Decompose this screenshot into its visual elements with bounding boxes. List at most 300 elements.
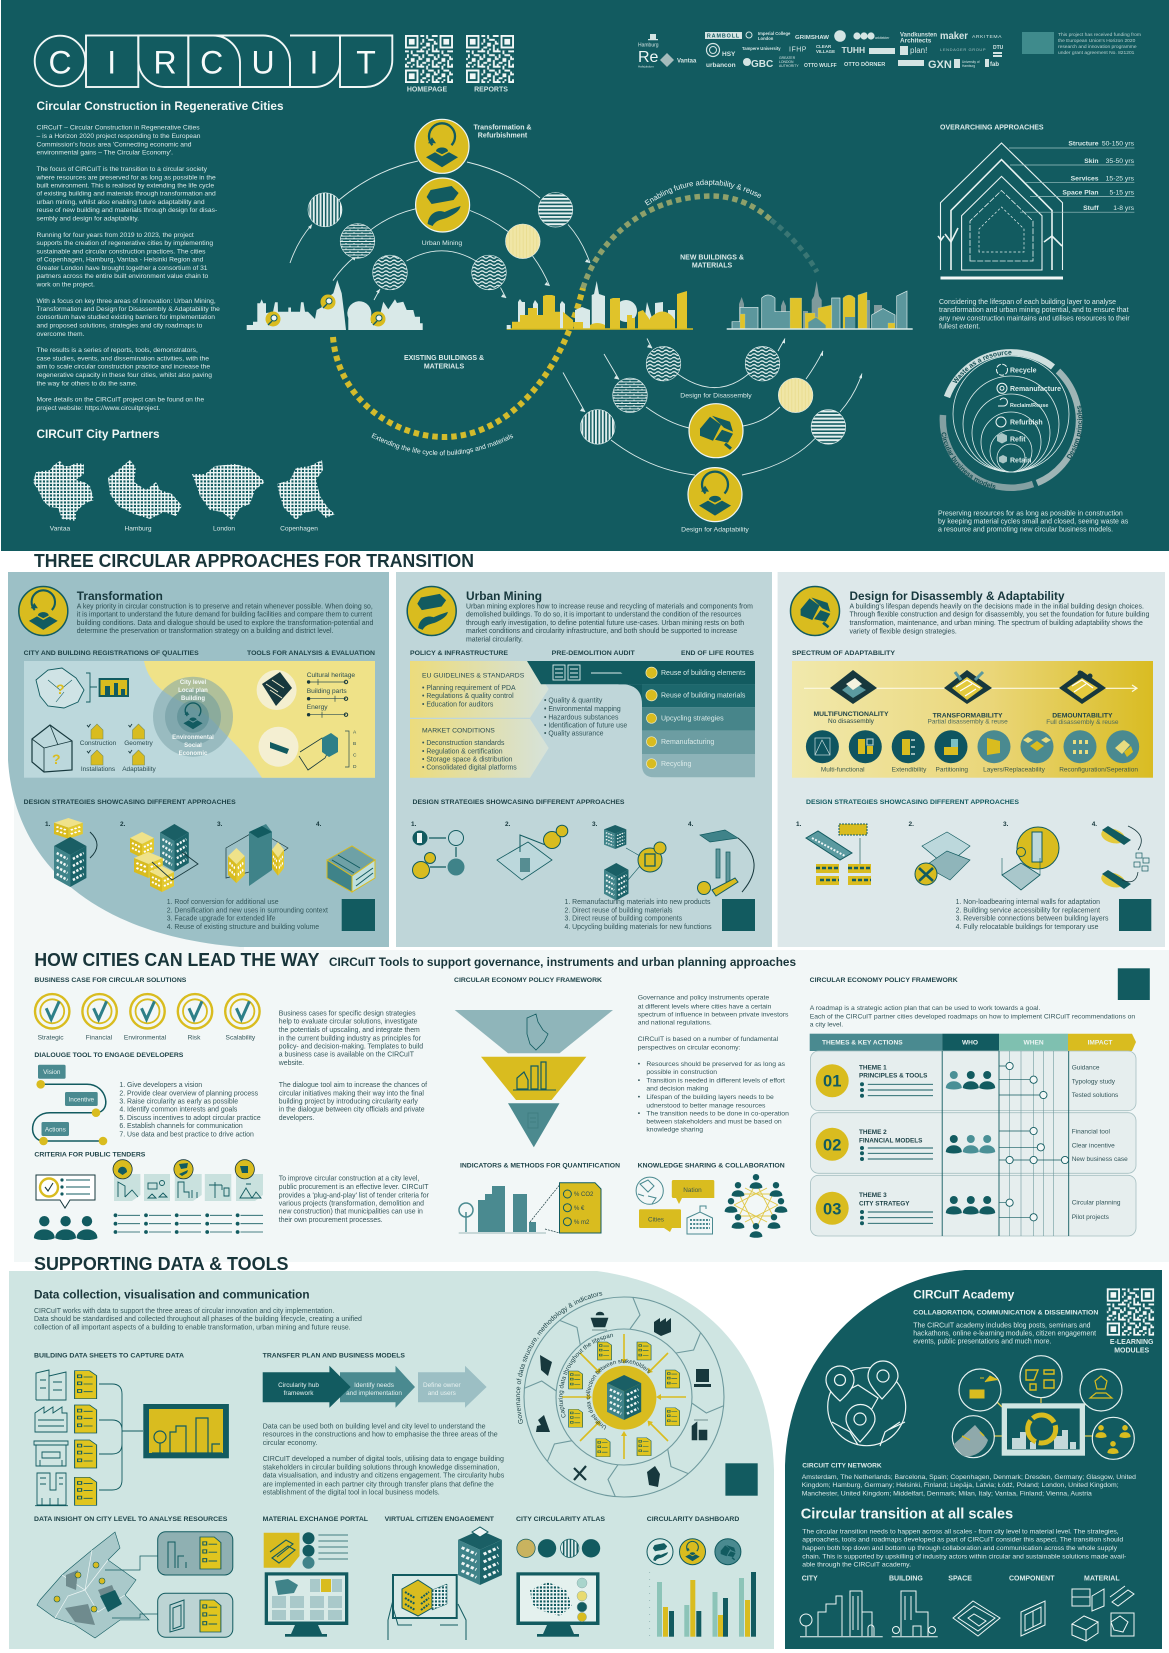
when timeline nodes	[999, 1062, 1069, 1221]
subheadings: qualities and tools: CITY AND BUILDING REGISTRATIONS OF QUALITIES	[24, 650, 199, 657]
text block: governance: CIRCuIT is based on a number of fundamental	[638, 1036, 779, 1043]
map: Copenhagen: Copenhagen	[280, 526, 318, 532]
section: roadmap framework: A roadmap is a strategic action plan that can be used to work towards a goal.	[810, 1005, 1040, 1012]
text block: circular transition: chain. This is supported by upskilling of industry actors within circular and sustainable solutions made avail-	[802, 1553, 1126, 1560]
icon: demountability	[1059, 670, 1106, 704]
icons: quality criteria: Construction	[80, 740, 117, 747]
labels: diagram captions: Refurbishment	[478, 132, 528, 140]
theme labels: CITY STRATEGY	[859, 1200, 910, 1207]
text block: governance: •	[638, 1110, 641, 1117]
chart: policy framework inverted pyramid: CIRCULAR ECONOMY POLICY FRAMEWORK	[454, 977, 602, 984]
section: business case: BUSINESS CASE FOR CIRCULAR SOLUTIONS	[34, 977, 186, 984]
text block: transformation summary: A key priority in circular construction is to preserve and retain whenever possible. When doing so,	[77, 603, 373, 610]
logo: CIRCUIT wordmark: I	[310, 44, 318, 80]
subheadings: policy, audit, routes: END OF LIFE ROUTES	[681, 650, 754, 657]
text block: city network: Manchester, United Kingdom; Middelfart, Denmark; Milan, Italy; Vantaa, Finland; Vienna, Austria	[802, 1490, 1092, 1497]
partner logos: DTU	[993, 45, 1004, 51]
placeholder square	[725, 1463, 758, 1496]
illustrations: adaptability strategies: 2.	[908, 821, 914, 828]
icons: quality criteria: Geometry	[124, 740, 154, 747]
text block: project introduction: and proposed solutions, strategies and city roadmaps to	[36, 323, 203, 330]
partner logos: Re	[638, 49, 659, 66]
icon: scan evaluation: D	[353, 764, 357, 770]
icon: building	[892, 1591, 938, 1637]
section: indicators and methods: INDICATORS & METHODS FOR QUANTIFICATION	[460, 1162, 620, 1169]
chart: registrations and tools strip	[24, 661, 375, 778]
panel: data collection	[9, 1271, 774, 1649]
partner logos: fab	[990, 62, 999, 68]
text block: project introduction: of Copenhagen, Hamburg, Vantaa - Helsinki Region and	[36, 257, 204, 264]
diagram: data wheel	[516, 1292, 725, 1498]
impact labels: Circular planning	[1072, 1200, 1121, 1207]
chevrons: guidelines and market conditions	[410, 661, 549, 778]
subheading: design strategies: DESIGN STRATEGIES SHOWCASING DIFFERENT APPROACHES	[806, 799, 1019, 806]
partner logos: VILLAGE	[816, 49, 835, 54]
text block: project introduction: project website: https://www.circuitproject.	[36, 405, 160, 412]
text block: academy description: events, public presentations and much more.	[913, 1339, 1051, 1346]
heading: city partners: CIRCuIT City Partners	[36, 427, 160, 441]
illustrations: transformation strategies: 2.	[120, 821, 126, 828]
text block: business cases: in the current building industry as principles for	[279, 1035, 422, 1042]
text block: data and digital tools: circular economy.	[263, 1440, 317, 1447]
theme labels	[859, 1064, 928, 1207]
subheading: CIRCuIT tools: CIRCuIT Tools to support governance, instruments and urban planning approaches	[329, 957, 796, 969]
partner logos: Hafsjukdom	[638, 64, 654, 68]
section: public tenders	[34, 1151, 263, 1240]
QR code: homepage	[405, 35, 453, 94]
labels: scales: COMPONENT	[1009, 1575, 1055, 1582]
text block: project introduction: built environment. This is realised by extending the life cycle	[36, 182, 214, 189]
partner logos: RAMBOLL	[707, 34, 740, 40]
partner logos: OTTO WULFF	[804, 63, 837, 69]
table header: WHO	[962, 1040, 978, 1047]
section: roadmap framework: 03	[823, 1200, 841, 1218]
illustrations: urban mining strategies: 3.	[592, 821, 598, 828]
panel: design for disassembly and adaptability	[778, 572, 1165, 947]
impact labels: Pilot projects	[1072, 1214, 1110, 1221]
text block: circular transition: happen both top down and bottom up through collaboration and communication across the whole supply	[802, 1545, 1118, 1552]
text block: project introduction: reuse of new building and materials through design for disas-	[36, 207, 217, 214]
illustrations: adaptability strategies: 4.	[1092, 821, 1097, 828]
labels: diagram captions: EXISTING BUILDINGS &	[404, 355, 484, 362]
text block: project introduction: work on the project.	[36, 282, 95, 289]
text block: data and digital tools: data visualisation, and industry and citizens engagement. The circularity hubs	[263, 1473, 505, 1480]
panel: how cities can lead the way	[14, 949, 1169, 1262]
icons: quality criteria: Installations	[81, 766, 116, 773]
chart: registrations and tools strip: Economic	[179, 751, 208, 757]
section: knowledge sharing	[636, 1162, 787, 1238]
subheading: design strategies: DESIGN STRATEGIES SHOWCASING DIFFERENT APPROACHES	[412, 799, 624, 806]
section: knowledge sharing: Cities	[648, 1217, 664, 1224]
icon: urban mining badge	[407, 586, 456, 636]
partner logos: London	[758, 36, 774, 41]
impact labels: Guidance	[1072, 1064, 1100, 1071]
partner logos: Imperial College	[758, 31, 791, 36]
partner logos: GBC	[751, 59, 773, 70]
list: adaptability strategies: 1. Non-loadbearing internal walls for adaptation	[956, 899, 1100, 906]
icon: dark heritage model	[257, 670, 297, 710]
map: Vantaa	[33, 461, 94, 532]
text block: preserving resources: by keeping material cycles small and closed, seeing waste as	[938, 518, 1129, 525]
chart: overarching approaches house layers: 5-15 yrs	[1109, 189, 1135, 196]
subheading: spectrum: SPECTRUM OF ADAPTABILITY	[792, 650, 896, 657]
chart: spectrum of adaptability: Full disassembly & reuse	[1046, 719, 1119, 726]
diagram: academy hub	[952, 1356, 1134, 1459]
list: adaptability strategies: 2. Building service accessibility for replacement	[956, 907, 1100, 914]
partner logos: IFHP	[789, 46, 807, 54]
chart: overarching approaches house layers: Stuff	[1083, 205, 1099, 212]
placeholder square	[1119, 899, 1151, 931]
text block: business cases: Business cases for specific design strategies	[279, 1010, 416, 1017]
partner logos: CLEAR	[816, 44, 832, 49]
section: business case: Scalability	[226, 1034, 256, 1041]
text block: public procurement: public procurement is an effective lever. CIRCuIT	[279, 1184, 429, 1191]
text block: dialogue tool: building project by introducing circularity early	[279, 1099, 418, 1106]
table header: WHEN	[1024, 1040, 1044, 1047]
text block: data and digital tools: are implemented in each partner city through transfer plans that define the	[263, 1481, 494, 1488]
chart: waste as a resource hierarchy	[940, 349, 1084, 491]
text block: data summary: Data should be standardised and collected throughout all phases of the building lifecycle, creating a unified	[34, 1316, 362, 1323]
diagram: data wheel: Capturing data throughout the lifespan	[558, 1334, 614, 1418]
section: roadmap framework: 02	[823, 1136, 841, 1154]
chart: overarching approaches house layers: Services	[1071, 175, 1099, 182]
text block: data and digital tools: establishment of the digital tool in local business models.	[263, 1489, 440, 1496]
heading: transformation: Transformation	[77, 589, 163, 603]
text block: governance: Transition is needed in different levels of effort	[646, 1077, 785, 1084]
illustrations: adaptability strategies: 1.	[796, 821, 802, 828]
sliders: cultural heritage, building parts, energy	[307, 672, 355, 718]
section: roadmap framework: a city level.	[810, 1022, 843, 1029]
heading: design for disassembly: Design for Disassembly & Adaptability	[850, 589, 1065, 603]
diagram: building data sheets	[34, 1370, 229, 1506]
illustrations: transformation strategies: 1.	[45, 821, 51, 828]
text block: transformation summary: it is important to understand the future demand for building facilities and compare them to current	[77, 612, 372, 619]
chevrons: guidelines and market conditions: EU GUIDELINES & STANDARDS	[422, 672, 525, 680]
list: end of life routes: Recycling	[661, 761, 691, 768]
chart: overarching approaches house layers: 1-8 yrs	[1113, 205, 1135, 212]
section: business case: Environmental	[124, 1034, 167, 1041]
text block: disassembly summary: A building's lifespan depends heavily on the decisions made in the initial building design choices.	[850, 603, 1144, 610]
icon: scan evaluation: C	[353, 752, 357, 758]
QR code: reports	[466, 35, 514, 94]
section: knowledge sharing: Nation	[683, 1187, 702, 1194]
text block: governance: •	[638, 1077, 641, 1084]
panel: urban mining	[396, 572, 772, 947]
section: dialogue tool	[33, 1052, 183, 1145]
text block: business cases: a business case is available on the CIRCuIT	[279, 1052, 415, 1059]
table header: IMPACT	[1088, 1040, 1112, 1047]
subheadings: sheets and transfer plan: TRANSFER PLAN AND BUSINESS MODELS	[263, 1352, 405, 1359]
text block: project introduction: sembly and design for adaptability.	[36, 215, 139, 222]
icon: globe with pins	[826, 1361, 906, 1446]
list: transformation strategies: 3. Facade upgrade for extended life	[167, 916, 276, 923]
icon: scan evaluation: A	[353, 730, 357, 736]
partner logos: Hamburg	[962, 64, 975, 68]
heading: how cities can lead: HOW CITIES CAN LEAD THE WAY	[34, 949, 320, 970]
funding notice with EU flag: research and innovation programme	[1058, 44, 1137, 50]
heading: urban mining: Urban Mining	[466, 589, 542, 603]
partner logos: LONDON	[779, 60, 794, 64]
text block: project introduction: With a focus on key three areas of innovation: Urban Mining,	[36, 298, 216, 305]
list: urban mining strategies: 3. Direct reuse of building components	[564, 916, 683, 923]
chart: overarching approaches house layers: 15-25 yrs	[1106, 175, 1135, 182]
heading: subtitle: Circular Construction in Regenerative Cities	[36, 99, 284, 113]
chart: overarching approaches house layers: 50-150 yrs	[1102, 140, 1135, 148]
icon: disassembly badge	[790, 586, 840, 636]
text block: city network: Kingdom; Hamburg, Germany; Helsinki, Finland; Liepāja, Latvia; Łódź, Poland; London, United Kingdom;	[802, 1482, 1119, 1489]
partner logos: Architects	[900, 38, 932, 44]
map: London: London	[213, 526, 235, 532]
subheadings: bottom row: CIRCULARITY DASHBOARD	[647, 1516, 740, 1523]
labels: diagram captions: Design for Disassembly	[680, 392, 752, 400]
chevrons: guidelines and market conditions: MARKET CONDITIONS	[422, 728, 495, 734]
map: Hamburg: Hamburg	[124, 526, 152, 532]
text block: public procurement: To improve circular construction at a city level,	[279, 1176, 419, 1183]
illustration: material exchange portal	[264, 1532, 348, 1637]
QR code: e-learning	[1107, 1288, 1154, 1354]
subheadings: bottom row: MATERIAL EXCHANGE PORTAL	[263, 1516, 368, 1523]
panel: academy and scales	[785, 1270, 1162, 1649]
text block: project introduction: sustainable and circular construction practices. The cities	[36, 249, 206, 256]
text block: urban mining summary: Urban mining explores how to increase reuse and recycling of materials and components from	[466, 603, 753, 610]
logo: CIRCUIT wordmark	[35, 35, 392, 87]
partner logos: ARKITEMA	[972, 34, 1002, 39]
chart: policy framework inverted pyramid	[454, 977, 613, 1147]
text block: data and digital tools: resources in the constructions and how to emphasise the three areas of the	[263, 1432, 498, 1439]
icon: scan evaluation	[258, 727, 357, 770]
text block: city network: CIRCUIT CITY NETWORK	[802, 1462, 882, 1469]
section: roadmap framework: Each of the CIRCuIT partner cities developed roadmaps on how to implement CIRCuIT recommendations on	[810, 1013, 1135, 1020]
subheadings: sheets and transfer plan: BUILDING DATA SHEETS TO CAPTURE DATA	[34, 1352, 184, 1359]
text block: disassembly summary: variety of flexible design strategies.	[850, 628, 957, 635]
chart: registrations and tools strip: Social	[184, 743, 202, 749]
partner logos: arkitekter	[875, 36, 890, 40]
curved label: enabling future adaptability: Enabling future adaptability & reuse	[644, 179, 762, 206]
diagram: pre-demolition audit: • Quality & quantity	[544, 698, 603, 705]
labels: diagram captions: Transformation &	[474, 124, 531, 132]
icon: component	[1021, 1601, 1045, 1636]
heading: supporting data and tools: SUPPORTING DATA & TOOLS	[34, 1253, 288, 1274]
text block: public procurement: new construction) that municipalities can use in	[279, 1209, 423, 1216]
labels: scales: BUILDING	[889, 1575, 923, 1582]
funding notice with EU flag: the European Union's Horizon 2020	[1058, 38, 1136, 44]
map: Vantaa: Vantaa	[50, 526, 71, 532]
map: Copenhagen	[277, 460, 335, 532]
text block: urban mining summary: through early investigation, to define potential future use-cases. Urban mining rests on both	[466, 620, 744, 627]
text block: project introduction: aim to scale circular construction practice and increase the	[36, 364, 210, 371]
section: indicators and methods: % CO2	[574, 1192, 594, 1198]
text block: project introduction: Greater London have brought together a consortium of 31	[36, 265, 208, 272]
diagram: dashed S curve of building lifecycle	[333, 196, 817, 437]
chart: waste as a resource hierarchy: Refurbish	[1010, 420, 1043, 426]
funding notice with EU flag: under grant agreement No. 821201	[1058, 50, 1135, 56]
text block: lifespan explanation: any new construction maintains and utilises resources to their	[939, 316, 1130, 323]
labels: diagram captions	[404, 124, 752, 534]
diagram: pre-demolition audit	[527, 661, 642, 738]
text block: project introduction: Running for four years from 2019 to 2023, the project	[36, 232, 194, 239]
illustrations: adaptability strategies: 3.	[1003, 821, 1009, 828]
text block: dialogue tool: The dialogue tool aim to increase the chances of	[279, 1082, 427, 1089]
icon: transformation circle	[415, 119, 469, 173]
text block: data summary: CIRCuIT works with data to support the three areas of circular innovation and city implementation.	[34, 1308, 334, 1315]
curved label: extending the life cycle: Extending the life cycle of buildings and materials	[372, 433, 514, 456]
skyline: future city	[727, 281, 913, 329]
panel: project overview header	[1, 0, 1169, 551]
chevrons: guidelines and market conditions: • Storage space & distribution	[422, 757, 513, 764]
list: end of life routes: Upcycling strategies	[661, 716, 724, 723]
partner logos: maker	[940, 31, 968, 42]
diagram: transfer plan arrows: Identify needs	[354, 1382, 394, 1389]
diagram: pre-demolition audit: • Hazardous substances	[544, 714, 619, 721]
partner logos: Tampere University	[742, 46, 781, 51]
section: business case: Strategic	[38, 1034, 64, 1041]
placeholder square	[342, 899, 375, 931]
text block: circular transition: The circular transition needs to happen across all scales - from city level to material level. The strategies,	[802, 1528, 1119, 1535]
partner logos: OTTO DÖRNER	[844, 61, 885, 68]
text block: governance: The transition needs to be done in co-operation	[646, 1110, 789, 1117]
theme labels: THEME 3	[859, 1192, 887, 1199]
skyline: existing city	[247, 280, 423, 330]
text block: dialogue tool: in the dialogue between city officials and private	[279, 1107, 425, 1114]
icon: city map with question mark: ?	[56, 681, 65, 697]
icon: space	[953, 1601, 1000, 1636]
icons: quality criteria: Adaptability	[122, 766, 157, 773]
section: dialogue tool: DIALOUGE TOOL TO ENGAGE DEVELOPERS	[34, 1052, 183, 1059]
text block: governance: spectrum of influence in between private investors	[638, 1011, 789, 1018]
list: urban mining strategies: 2. Direct reuse of building materials	[564, 907, 673, 914]
text block: project introduction: environmental gains – The Circular Economy'.	[36, 150, 173, 157]
labels: scales: CITY	[802, 1575, 818, 1582]
sliders: cultural heritage, building parts, energy: Energy	[307, 704, 328, 711]
text block: project introduction: of existing building and materials through transformation and	[36, 190, 216, 197]
text block: project introduction: partners across the entire built environment value chain to	[36, 273, 209, 280]
logo: CIRCUIT wordmark: R	[153, 44, 177, 80]
diagram: transfer plan arrows	[263, 1366, 487, 1408]
chart: waste as a resource hierarchy: Design principles	[1066, 406, 1084, 460]
partner logos: GREATER	[779, 56, 796, 60]
section: roadmap framework: 01	[823, 1073, 841, 1091]
chart: waste as a resource hierarchy: Retain	[1010, 458, 1031, 464]
chart: overarching approaches house layers: Skin	[1084, 158, 1099, 165]
list: adaptability strategies: 4. Fully relocatable buildings for temporary use	[956, 924, 1099, 931]
icon: materials	[1072, 1586, 1134, 1641]
partner logos: GXN	[928, 59, 952, 71]
chart: spectrum of adaptability: MULTIFUNCTIONALITY	[813, 711, 889, 718]
chart: registrations and tools strip: Building	[181, 696, 205, 702]
theme labels: FINANCIAL MODELS	[859, 1137, 923, 1144]
text block: project introduction: the way for others to do the same.	[36, 380, 138, 388]
text block: project introduction: The focus of CIRCuIT is the transition to a circular society	[36, 166, 208, 173]
illustration: virtual citizen engagement	[388, 1527, 502, 1640]
logo: CIRCUIT wordmark: T	[356, 44, 376, 80]
text block: project introduction: Transformation and Design for Disassembly & Adaptability the	[36, 306, 220, 313]
icon: city map with question mark	[36, 668, 97, 708]
chevrons: guidelines and market conditions: • Regulations & quality control	[422, 693, 514, 700]
subheadings: policy, audit, routes: PRE-DEMOLITION AUDIT	[552, 650, 635, 657]
text block: academy description: hackathons, online e-learning modules, citizen engagement	[913, 1331, 1096, 1338]
table rows	[810, 1051, 1136, 1236]
subheadings: bottom row: CITY CIRCULARITY ATLAS	[516, 1516, 605, 1523]
chart: waste as a resource hierarchy: Remanufacture	[1010, 386, 1061, 393]
subheadings: bottom row: DATA INSIGHT ON CITY LEVEL TO ANALYSE RESOURCES	[34, 1516, 227, 1523]
text block: public procurement: their own procurement processes.	[279, 1217, 383, 1224]
placeholder square	[722, 899, 755, 931]
section: public tenders: CRITERIA FOR PUBLIC TENDERS	[34, 1151, 145, 1158]
text block: governance: knowledge sharing	[646, 1127, 703, 1134]
list: dialogue steps: 3. Raise circularity as early as possible	[119, 1099, 238, 1106]
diagram: pre-demolition audit: • Identification of future use	[544, 722, 627, 729]
chevrons: guidelines and market conditions: • Regulation & certification	[422, 748, 503, 755]
partner logos: Vandkunsten	[900, 32, 937, 38]
chart: overarching approaches house layers: Structure	[1068, 140, 1099, 148]
labels: scales: SPACE	[948, 1575, 972, 1582]
diagram: data wheel: Unified data collection between stakeholders	[586, 1358, 650, 1430]
text block: governance: at different levels where cities have a certain	[638, 1003, 772, 1010]
list: urban mining strategies: 1. Remanufacturing materials into new products	[564, 899, 711, 906]
text block: data and digital tools: CIRCuIT developed a number of digital tools, utilising data to engage building	[263, 1456, 504, 1463]
text block: dialogue tool: developers.	[279, 1115, 315, 1122]
section: business case	[34, 977, 260, 1041]
chart: overarching approaches house layers: OVERARCHING APPROACHES	[940, 124, 1044, 132]
text block: project introduction: The results is a series of reports, tools, demonstrators,	[36, 347, 198, 354]
illustrations: adaptability strategies	[796, 821, 1149, 890]
text block: lifespan explanation: fullest extent.	[939, 323, 980, 330]
subheading: collaboration: COLLABORATION, COMMUNICATION & DISSEMINATION	[913, 1309, 1099, 1316]
partner logos: Hamburg	[638, 42, 659, 48]
icon: registration screen	[99, 678, 129, 697]
chevrons: guidelines and market conditions: • Education for auditors	[422, 701, 494, 708]
list: dialogue steps: 1. Give developers a vision	[119, 1082, 202, 1089]
chart: spectrum of adaptability: No disassembly	[828, 718, 875, 725]
logo: CIRCUIT wordmark: U	[251, 44, 275, 80]
section: knowledge sharing: KNOWLEDGE SHARING & COLLABORATION	[638, 1162, 785, 1169]
section: dialogue tool: Actions	[45, 1126, 66, 1133]
chevrons: guidelines and market conditions: • Deconstruction standards	[422, 740, 505, 747]
chart: waste as a resource hierarchy: Circular business models	[942, 432, 996, 489]
chart: waste as a resource hierarchy: Waste as a resource	[952, 350, 1012, 384]
theme labels: THEME 1	[859, 1064, 887, 1071]
list: transformation strategies: 4. Reuse of existing structure and building volume	[167, 924, 319, 931]
text block: dialogue tool: circular initiatives making their way into the final	[279, 1090, 424, 1097]
text block: data summary: collection of all important aspects of a building to enable transformation, urban mining and future reuse.	[34, 1324, 351, 1331]
illustrations: transformation strategies	[45, 818, 375, 892]
list: urban mining strategies: 4. Upcycling building materials for new functions	[564, 924, 712, 931]
text block: governance: Resources should be preserved for as long as	[646, 1061, 786, 1068]
text block: urban mining summary: material circularity.	[466, 637, 523, 644]
chart: registrations and tools strip: City level	[180, 680, 206, 686]
section: dialogue tool: Incentive	[69, 1096, 95, 1103]
partner logos: urbancon	[706, 62, 736, 69]
text block: project introduction: – is a Horizon 2020 project responding to the European	[36, 133, 201, 140]
text block: lifespan explanation: Considering the lifespan of each building layer to analyse	[939, 299, 1116, 306]
labels: scales	[802, 1575, 1120, 1582]
text block: circular transition: approaches, tools and roadmaps developed as part of CIRCuIT consider this aspect. The transition should	[802, 1537, 1123, 1544]
diagram: transfer plan arrows: Define owner	[423, 1382, 461, 1389]
chart: spectrum of adaptability	[792, 661, 1153, 778]
theme labels: PRINCIPLES & TOOLS	[859, 1072, 928, 1079]
sliders: cultural heritage, building parts, energy: Cultural heritage	[307, 672, 355, 679]
text block: governance: and decision making	[646, 1086, 709, 1093]
QR code: e-learning: E-LEARNING	[1110, 1339, 1154, 1346]
subheadings: bottom row: VIRTUAL CITIZEN ENGAGEMENT	[385, 1516, 494, 1523]
table header: THEMES & KEY ACTIONS	[822, 1040, 903, 1047]
text block: lifespan explanation: transformation and urban mining potential, and to ensure that	[939, 307, 1129, 314]
section: roadmap framework	[810, 968, 1150, 1236]
icons: quality criteria	[80, 724, 157, 773]
text block: governance: •	[638, 1061, 641, 1068]
chevrons: guidelines and market conditions: • Consolidated digital platforms	[422, 765, 517, 772]
text block: disassembly summary: transformation, maintenance, and urban mining. The spectrum of building adaptability shows the	[850, 620, 1143, 627]
